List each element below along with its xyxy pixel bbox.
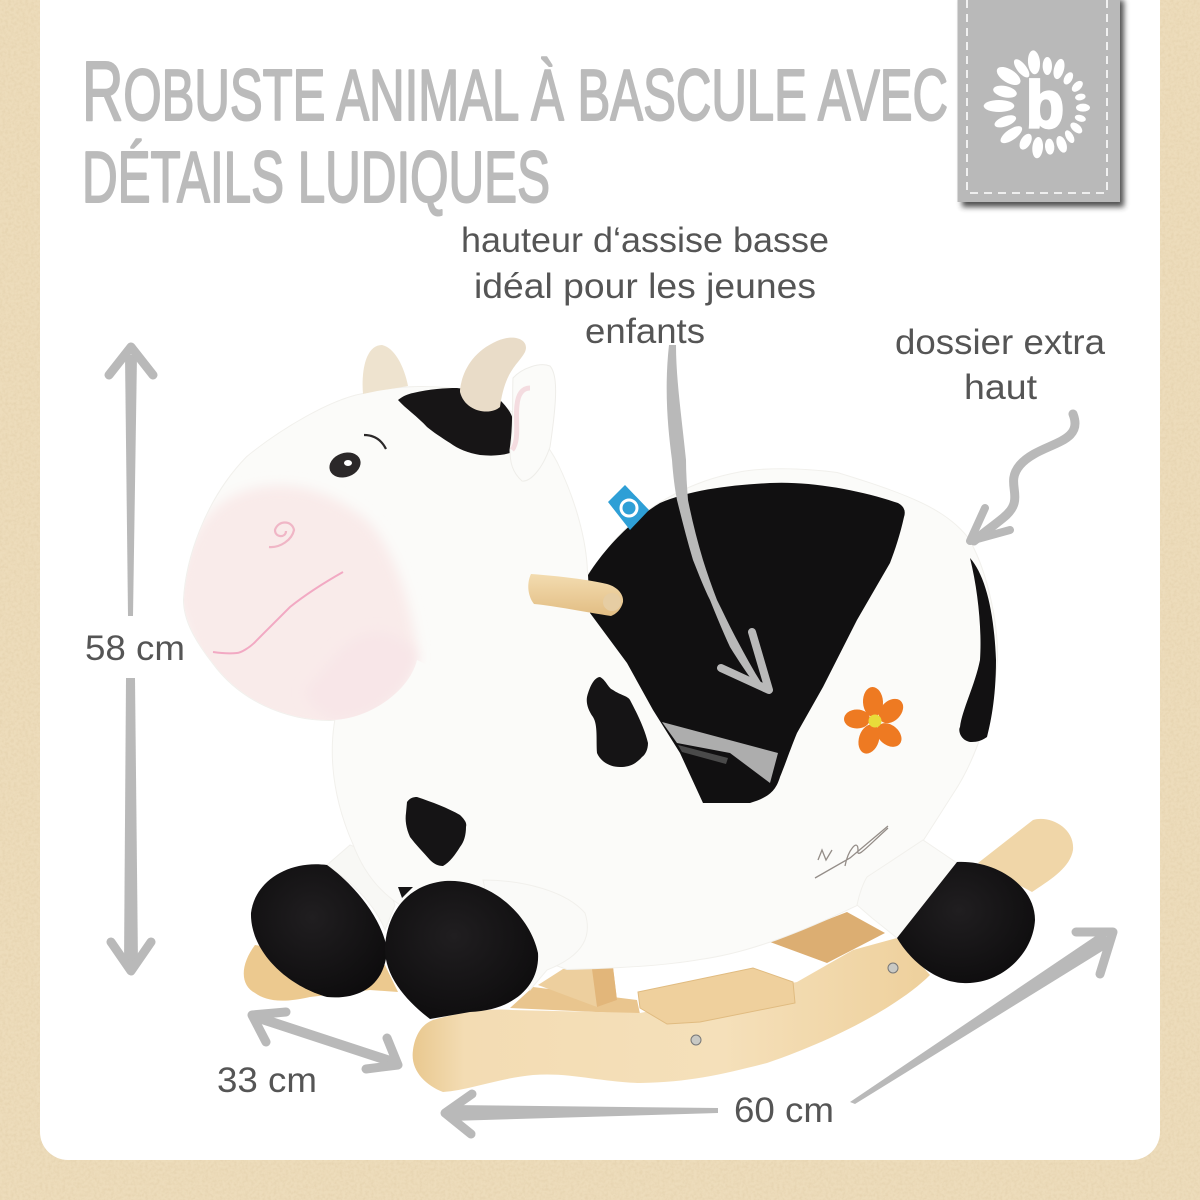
harness [662, 722, 778, 783]
rear rockers [244, 945, 398, 1001]
front rocker [413, 938, 930, 1092]
title [82, 44, 948, 218]
label: seat height: hauteur d‘assise basse [461, 221, 829, 260]
left horn [363, 345, 408, 394]
label: backrest: haut [964, 368, 1037, 407]
right leg [857, 840, 957, 938]
title: DÉTAILS LUDIQUES [82, 138, 550, 218]
rear beam [770, 912, 885, 963]
icon: flower logo: b [1026, 67, 1064, 141]
screws [691, 963, 898, 1045]
label: backrest [895, 323, 1106, 407]
right foot [897, 862, 1035, 983]
brand tag with logo [958, 0, 1124, 207]
head and body outline underlay [184, 387, 997, 969]
arrow: depth 33 cm [252, 1012, 398, 1069]
orange flower [844, 686, 908, 756]
label: seat height: idéal pour les jeunes [474, 267, 816, 306]
body spot two [406, 797, 466, 866]
front leg [483, 880, 587, 990]
tail tip [398, 887, 413, 898]
wooden handle [528, 574, 623, 616]
arrow: seat pointer [667, 345, 769, 690]
label: 33 cm: 33 cm [217, 1061, 317, 1100]
eye and brow [326, 448, 364, 482]
front foot [385, 881, 538, 1019]
right black patch [959, 558, 996, 742]
head [184, 387, 587, 720]
seat plank [638, 968, 795, 1024]
icon: flower logo [984, 50, 1090, 159]
label: 58 cm: 58 cm [85, 629, 185, 668]
label: 60 cm: 60 cm [734, 1091, 834, 1130]
body [333, 469, 997, 969]
label: backrest: dossier extra [895, 323, 1106, 362]
arrow: length diagonal [850, 931, 1113, 1104]
signature [815, 826, 888, 878]
rear left leg [327, 845, 395, 930]
arrow: backrest pointer [970, 414, 1075, 541]
head black patch [398, 388, 513, 456]
centre rail [510, 987, 640, 1014]
nostril spiral [269, 522, 294, 547]
blue tag [608, 485, 649, 530]
label: seat height: enfants [585, 312, 705, 351]
ear [510, 365, 556, 481]
black seat [588, 483, 905, 803]
body spot one [587, 677, 648, 767]
rocking cow product [175, 338, 1073, 1092]
pink muzzle [175, 485, 417, 730]
right horn [460, 338, 526, 412]
centre block [538, 967, 617, 1007]
label: seat height [461, 221, 829, 351]
mouth [213, 572, 343, 653]
rear left foot [251, 864, 387, 997]
arrow: height 58 cm [109, 347, 153, 971]
arrow: length bottom [445, 1094, 718, 1134]
